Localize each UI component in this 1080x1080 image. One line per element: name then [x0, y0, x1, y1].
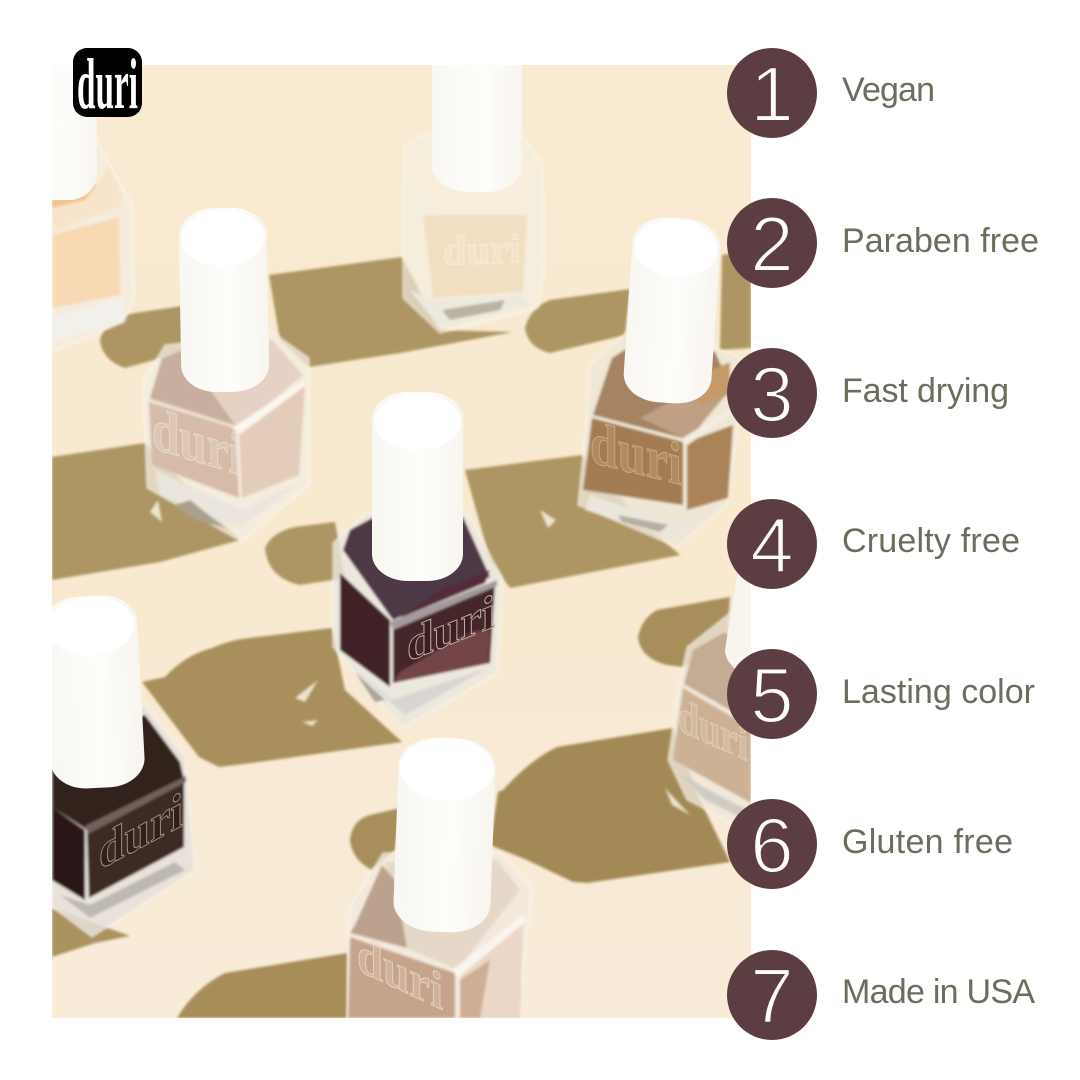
bottle 6: dark brown, cropped left	[42, 594, 195, 937]
list item 5: Lasting color	[727, 649, 1035, 739]
photo: nail polish bottles	[25, 25, 755, 1022]
bottle 6: dark brown, cropped left: duri	[99, 780, 183, 881]
bottle 3: cream	[400, 65, 546, 335]
bottle 1: peach, cropped top left	[52, 65, 135, 353]
bottle 7: taupe, cropped right: duri	[678, 687, 748, 772]
list item 3: Fast drying: 3	[750, 350, 794, 438]
list item 7: Made in USA	[727, 950, 1035, 1040]
list item 7: Made in USA: Made in USA	[842, 973, 1035, 1011]
list item 3: Fast drying	[727, 348, 1009, 438]
list item 2: Paraben free	[727, 198, 1039, 288]
list item 2: Paraben free: Paraben free	[842, 222, 1039, 260]
bottle 4: bronze	[578, 215, 740, 547]
text: duri	[77, 44, 138, 124]
bottle 8: nude, cropped bottom	[347, 736, 532, 1022]
bottle 5: plum: duri	[407, 584, 495, 673]
list item 4: Cruelty free: 4	[750, 501, 794, 589]
list item 4: Cruelty free	[727, 499, 1020, 589]
list item 6: Gluten free: 6	[750, 801, 794, 889]
bottle 5: plum	[333, 392, 502, 728]
bottle 4: bronze: duri	[590, 410, 682, 499]
list item 5: Lasting color: 5	[750, 651, 794, 739]
bottle shadows	[52, 250, 751, 1018]
bottle 7: taupe, cropped right	[668, 570, 755, 832]
logo: duri	[73, 44, 142, 124]
light sparkles	[150, 500, 690, 815]
bottle 2: beige: duri	[152, 395, 242, 489]
list item 3: Fast drying: Fast drying	[842, 372, 1009, 410]
list item 5: Lasting color: Lasting color	[842, 673, 1035, 711]
list item 6: Gluten free	[727, 799, 1013, 889]
bottle 2: beige	[143, 207, 309, 542]
list item 7: Made in USA: 7	[750, 952, 794, 1040]
list item 2: Paraben free: 2	[750, 200, 794, 288]
list item 6: Gluten free: Gluten free	[842, 823, 1013, 861]
list item 1: Vegan	[727, 48, 935, 138]
bottle 8: nude, cropped bottom: duri	[357, 923, 443, 1021]
list item 1: Vegan: 1	[750, 50, 794, 138]
bottle 3: cream: duri	[443, 226, 521, 275]
list item 1: Vegan: Vegan	[842, 71, 935, 109]
list item 4: Cruelty free: Cruelty free	[842, 522, 1020, 560]
